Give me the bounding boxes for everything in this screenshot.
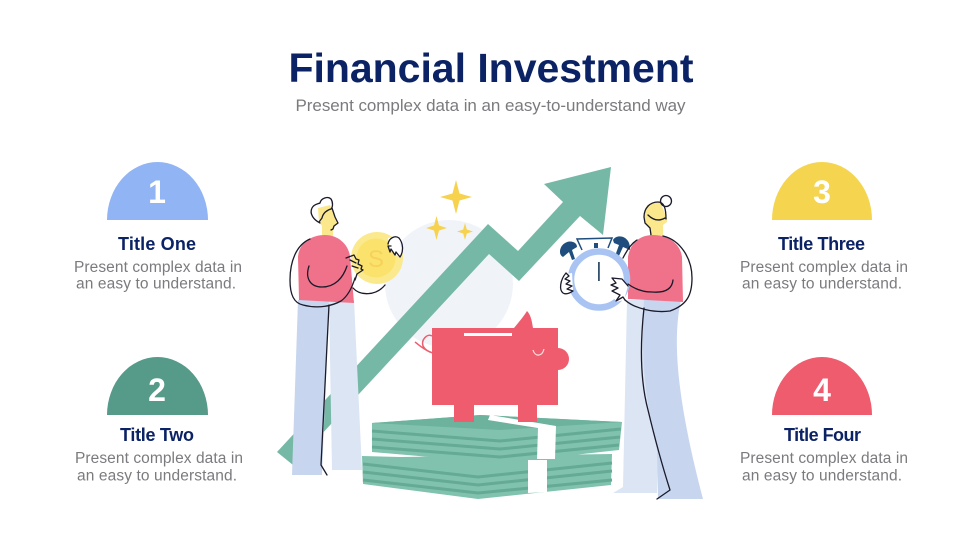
coin: S — [368, 246, 384, 273]
panel: item one — [74, 162, 242, 292]
arms and hands — [561, 236, 692, 312]
person: woman holding stopwatch — [560, 196, 703, 499]
text: description three: an easy to understand. — [742, 276, 902, 292]
text: description one: Present complex data in — [74, 259, 242, 276]
badge: two — [107, 357, 208, 415]
torso — [628, 235, 683, 302]
neck and head — [644, 196, 672, 236]
money stacks — [362, 415, 622, 499]
text: description three — [740, 259, 908, 292]
heading: title one: Title One — [118, 234, 196, 254]
badge: four — [772, 357, 872, 415]
text: description two: Present complex data in — [75, 450, 243, 467]
piggy bank — [415, 311, 569, 422]
coin — [351, 232, 403, 284]
badge: one — [107, 162, 208, 220]
text: description one — [74, 259, 242, 292]
heading: title two: Title Two — [120, 425, 194, 445]
person: man holding coin — [290, 198, 403, 475]
legs — [292, 300, 329, 475]
torso — [298, 235, 354, 303]
text: description two — [75, 450, 243, 484]
badge: one: 1 — [148, 174, 166, 210]
legs — [613, 300, 658, 493]
subtitle: Present complex data in an easy-to-understand way — [296, 96, 686, 115]
illustration: financial growth — [277, 167, 703, 499]
stopwatch — [560, 236, 630, 308]
badge: four: 4 — [813, 372, 831, 408]
text: description three: Present complex data in — [740, 259, 908, 276]
backdrop circle — [385, 220, 513, 348]
neck and head — [311, 198, 338, 236]
text: description one: an easy to understand. — [76, 276, 236, 292]
badge: two: 2 — [148, 372, 166, 408]
text: description four — [740, 450, 908, 484]
heading: title three: Title Three — [778, 234, 865, 254]
top stack — [372, 415, 622, 463]
title: Financial Investment — [288, 45, 694, 91]
arms and hands — [290, 236, 403, 307]
arrow: growth trend — [277, 167, 611, 465]
badge: three — [772, 162, 872, 220]
text: description four: an easy to understand. — [742, 468, 902, 484]
badge: three: 3 — [813, 174, 831, 210]
heading: title four: Title Four — [784, 425, 861, 445]
text: description two: an easy to understand. — [77, 468, 237, 484]
panel: item four — [740, 357, 908, 484]
bottom stack — [362, 454, 612, 499]
panel: item three — [740, 162, 908, 292]
text: description four: Present complex data in — [740, 450, 908, 467]
icon: sparkles — [426, 180, 473, 240]
panel: item two — [75, 357, 243, 484]
